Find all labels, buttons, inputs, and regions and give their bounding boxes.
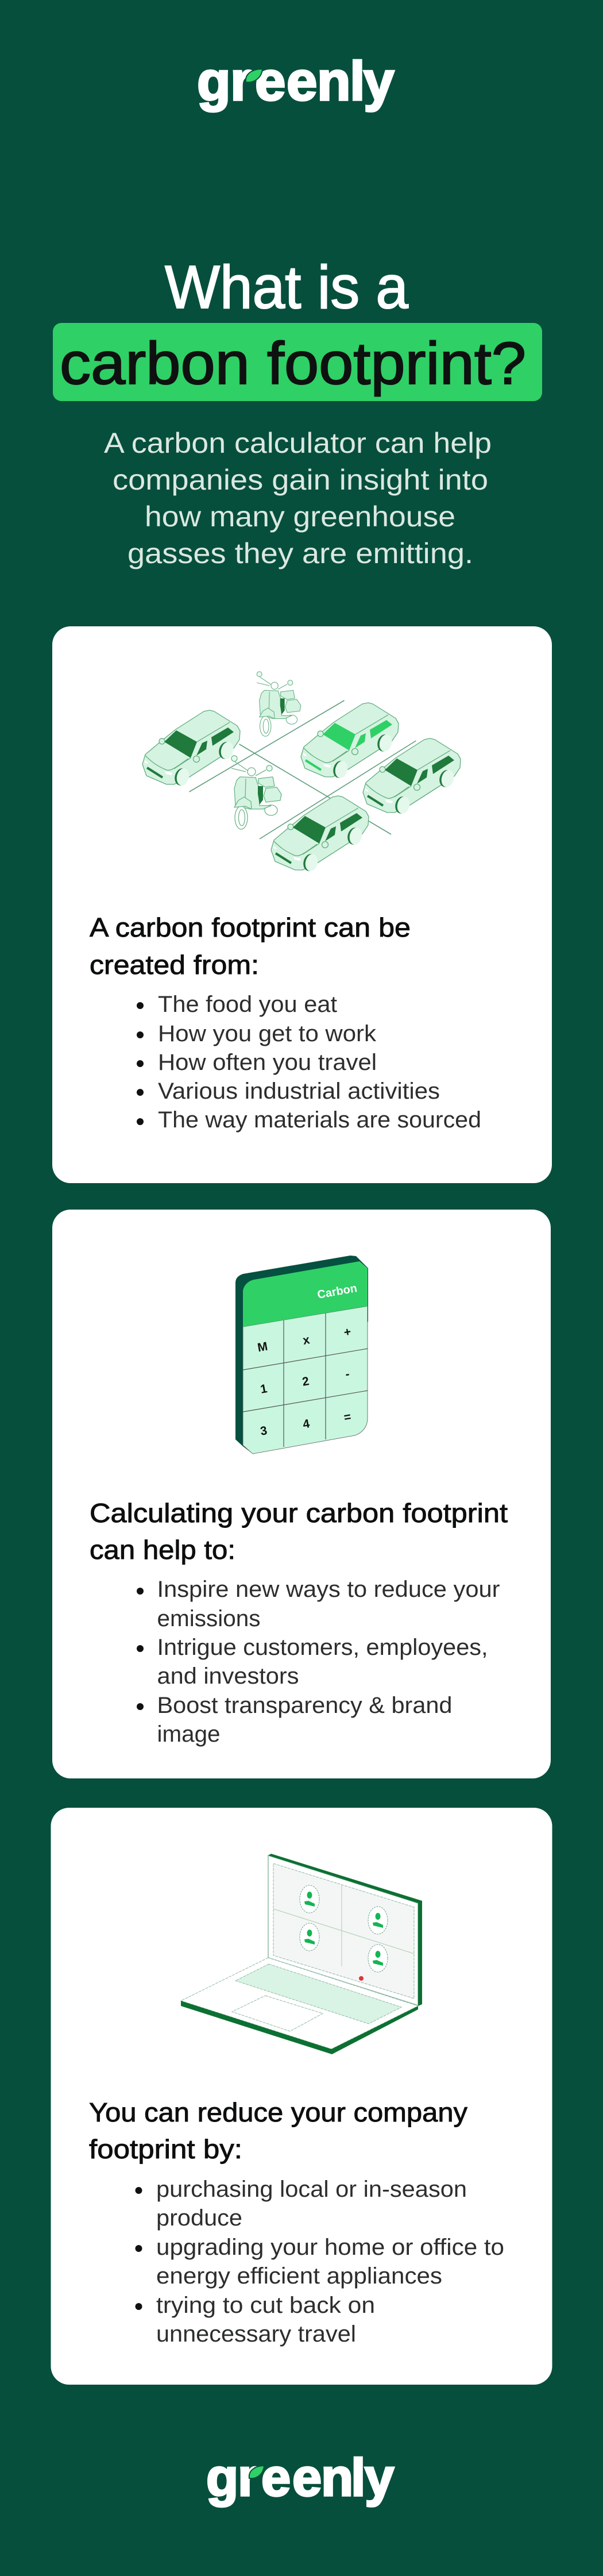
- illustration: calculator: 1: [260, 1382, 268, 1396]
- heading: footprint by:: [89, 2134, 242, 2164]
- bullet list: upgrading your home or office to: [156, 2235, 504, 2260]
- bullet list: Various industrial activities: [158, 1079, 440, 1104]
- heading: A carbon footprint can be: [90, 912, 411, 942]
- illustration: calculator: 4: [302, 1417, 311, 1431]
- bullet list: The way materials are sourced: [158, 1107, 481, 1133]
- bullet list: trying to cut back on: [156, 2293, 375, 2318]
- heading: You can reduce your company: [89, 2097, 467, 2127]
- intro paragraph: companies gain insight into: [113, 464, 488, 496]
- illustration: calculator: 3: [260, 1424, 268, 1438]
- illustration: laptop with video call: [181, 1854, 422, 2054]
- bullet list: and investors: [157, 1664, 299, 1689]
- heading: created from:: [90, 950, 259, 980]
- bullet list: [136, 2177, 504, 2347]
- bullet list: emissions: [157, 1606, 261, 1631]
- logo: greenly footer: greenly: [206, 2448, 394, 2507]
- bullet list: Inspire new ways to reduce your: [157, 1577, 500, 1602]
- illustration: calculator: =: [343, 1410, 352, 1424]
- bullet list: image: [157, 1722, 221, 1747]
- intro paragraph: gasses they are emitting.: [127, 537, 473, 569]
- heading: [89, 2097, 467, 2164]
- illustration: calculator: +: [343, 1325, 352, 1339]
- illustration: calculator: M: [257, 1340, 269, 1354]
- bullet list: purchasing local or in-season: [156, 2177, 467, 2202]
- intro paragraph: A carbon calculator can help: [104, 427, 492, 459]
- heading: [90, 1498, 508, 1565]
- illustration: cars and scooters: [142, 672, 461, 872]
- bullet list: [137, 1577, 500, 1747]
- panel: carbon footprint sources: [52, 626, 552, 1183]
- bullet list: [137, 992, 481, 1133]
- illustration: calculator: x: [302, 1333, 311, 1347]
- bullet list: Intrigue customers, employees,: [157, 1635, 488, 1660]
- title highlight: carbon footprint?: carbon footprint?: [60, 330, 526, 397]
- bullet list: How often you travel: [158, 1050, 377, 1075]
- title: What is a: [165, 253, 408, 321]
- bullet list: unnecessary travel: [156, 2321, 356, 2347]
- illustration: calculator: Carbon: [316, 1282, 358, 1302]
- illustration: calculator: 2: [302, 1374, 310, 1389]
- bullet list: energy efficient appliances: [156, 2263, 442, 2289]
- heading: can help to:: [90, 1535, 235, 1565]
- panel: reducing footprint: [51, 1808, 552, 2385]
- intro paragraph: [104, 427, 492, 569]
- illustration: calculator: [235, 1256, 368, 1454]
- panel: benefits of calculating: [52, 1210, 551, 1778]
- bullet list: Boost transparency & brand: [157, 1693, 453, 1718]
- logo: greenly header: greenly: [197, 51, 394, 112]
- title: [53, 253, 542, 401]
- heading: Calculating your carbon footprint: [90, 1498, 508, 1528]
- bullet list: produce: [156, 2205, 242, 2231]
- illustration: calculator: -: [344, 1368, 350, 1381]
- bullet list: The food you eat: [158, 992, 337, 1017]
- intro paragraph: how many greenhouse: [145, 500, 455, 533]
- heading: [90, 912, 411, 980]
- bullet list: How you get to work: [158, 1021, 377, 1046]
